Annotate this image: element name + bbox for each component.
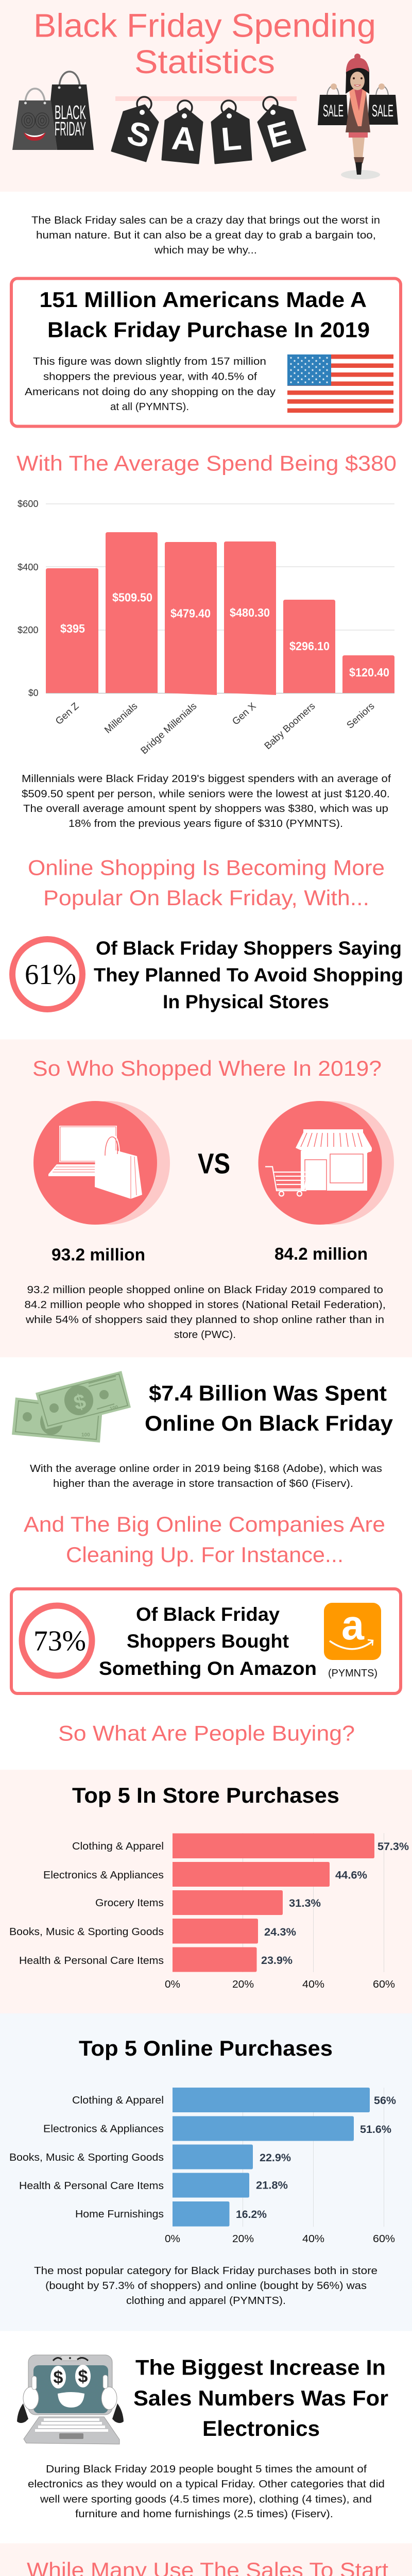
text block: millennials: Millennials were Black Friday 2019's biggest spenders with an average of xyxy=(22,773,391,785)
category labels xyxy=(9,2094,164,2220)
values: 44.6% xyxy=(335,1869,367,1882)
text block: shoppers figure xyxy=(25,355,276,413)
text block: average order: higher than the average in store transaction of $60 (Fiserv). xyxy=(53,1478,353,1489)
axis ticks: 20% xyxy=(232,2233,254,2245)
text: amazon shoppers: Shoppers Bought xyxy=(127,1631,289,1652)
heading: electronics: The Biggest Increase In xyxy=(135,2355,386,2379)
icon: sale tags xyxy=(112,96,305,163)
values: 31.3% xyxy=(289,1897,321,1909)
y axis labels: $400 xyxy=(18,562,38,572)
heading: electronics: Electronics xyxy=(202,2416,320,2441)
x axis labels: Millenials xyxy=(102,701,140,736)
panel: hero xyxy=(0,0,412,192)
title xyxy=(33,7,376,80)
callout: 61 percent: They Planned To Avoid Shopping xyxy=(94,964,403,986)
heading: online shopping: Popular On Black Friday, With... xyxy=(43,886,369,910)
text block: shoppers figure: shoppers the previous year, with 40.5% of xyxy=(43,371,257,382)
text block: shoppers comparison: 93.2 million people shopped online on Black Friday 2019 compared to xyxy=(27,1284,383,1296)
text block: most popular category: The most popular category for Black Friday purchases both in store xyxy=(34,2265,377,2277)
icon: woman holding sale bags xyxy=(318,54,398,179)
bars xyxy=(46,532,394,695)
icon: amazon logo xyxy=(324,1602,381,1660)
text block: shoppers comparison xyxy=(25,1284,386,1341)
panel: holiday shopping xyxy=(0,2543,412,2576)
category labels: Electronics & Appliances xyxy=(43,1869,164,1881)
text block: shoppers comparison: 84.2 million people who shopped in stores (National Retail Federation), xyxy=(25,1299,386,1311)
heading: electronics: Sales Numbers Was For xyxy=(133,2386,388,2410)
category labels: Clothing & Apparel xyxy=(72,1840,164,1852)
category labels: Books, Music & Sporting Goods xyxy=(9,2151,164,2163)
x axis labels: Baby Boomers xyxy=(263,701,317,752)
text block: most popular category: clothing and apparel (PYMNTS). xyxy=(126,2295,286,2307)
source: pymnts: (PYMNTS) xyxy=(328,1667,377,1679)
icon: dollar bills: 100 xyxy=(109,1404,119,1412)
text block: millennials: 18% from the previous years figure of $310 (PYMNTS). xyxy=(68,818,343,829)
values xyxy=(236,2094,396,2221)
values: 21.8% xyxy=(256,2179,288,2192)
values: 23.9% xyxy=(261,1954,293,1967)
heading: online shopping xyxy=(28,855,385,910)
text block: average order xyxy=(30,1463,382,1489)
icon: dollar bills: 100 xyxy=(81,1432,90,1438)
text block: millennials: The overall average amount spent by shoppers was $380, which was up xyxy=(23,803,388,815)
text block: intro: The Black Friday sales can be a crazy day that brings out the worst in xyxy=(31,214,380,226)
values: 16.2% xyxy=(236,2208,267,2221)
axis ticks: 40% xyxy=(302,1978,324,1990)
callout: 61 percent: 61% xyxy=(25,959,76,991)
heading: average spend: With The Average Spend Being $380 xyxy=(16,451,397,475)
panel: amazon callout xyxy=(11,1589,401,1693)
heading: what are people buying: So What Are People Buying? xyxy=(58,1721,355,1745)
bar values: $395 xyxy=(60,622,85,635)
text block: millennials: $509.50 spent per person, while seniors were the lowest at just $120.40. xyxy=(22,788,390,800)
text block: electronics sales: well were sporting goods (4.5 times more), clothing (4 times), and xyxy=(40,2494,372,2505)
chart title: Top 5 Online Purchases xyxy=(79,2036,333,2060)
x axis labels: Seniors xyxy=(345,701,376,731)
icon: sale tags: L xyxy=(219,120,243,158)
icon: happy laptop: $ xyxy=(78,2367,88,2386)
text block: electronics sales: furniture and home furnishings (2.5 times) (Fiserv). xyxy=(75,2508,333,2520)
category labels: Health & Personal Care Items xyxy=(19,2180,164,2192)
text block: electronics sales: electronics as they would on a typical Friday. Other categories that did xyxy=(28,2478,385,2490)
icon: happy laptop: $ xyxy=(54,2368,63,2387)
axis ticks xyxy=(165,1978,395,1990)
axis ticks: 60% xyxy=(373,2233,395,2245)
panel: 151 million americans xyxy=(11,278,401,427)
values xyxy=(261,1840,409,1967)
axis ticks: 20% xyxy=(232,1978,254,1990)
text block: shoppers figure: at all (PYMNTS). xyxy=(110,401,189,413)
icon: dollar bills xyxy=(12,1371,131,1443)
bar chart: average spend by generation xyxy=(18,499,394,756)
icon: dollar bills: $ xyxy=(72,1390,88,1415)
bar values: $296.10 xyxy=(289,639,330,653)
category labels: Health & Personal Care Items xyxy=(19,1955,164,1967)
values: 57.3% xyxy=(377,1840,409,1853)
y axis labels: $600 xyxy=(18,499,38,509)
values: 24.3% xyxy=(264,1926,296,1938)
values: 51.6% xyxy=(360,2123,391,2136)
text block: millennials xyxy=(22,773,391,829)
category labels: Clothing & Apparel xyxy=(72,2094,164,2106)
text block: intro: which may be why... xyxy=(154,244,257,256)
category labels: Electronics & Appliances xyxy=(43,2123,164,2135)
icon: online shopping xyxy=(33,1101,170,1225)
bars xyxy=(173,1833,374,1972)
stat: store shoppers: 84.2 million xyxy=(274,1244,368,1263)
icon: sale tags: E xyxy=(263,113,294,155)
bar values xyxy=(60,590,389,679)
y axis labels: $200 xyxy=(18,625,38,635)
text block: most popular category xyxy=(34,2265,377,2307)
axis ticks: 60% xyxy=(373,1978,395,1990)
text block: electronics sales xyxy=(28,2463,385,2520)
bar values: $120.40 xyxy=(349,666,389,679)
heading: big online companies: Cleaning Up. For Instance... xyxy=(66,1543,344,1567)
text: amazon shoppers: Of Black Friday xyxy=(136,1604,280,1625)
heading: 151 million: Black Friday Purchase In 2019 xyxy=(47,317,370,342)
values: 56% xyxy=(374,2094,396,2107)
panel: top 5 online xyxy=(0,2013,412,2331)
heading: who shopped where: So Who Shopped Where In 2019? xyxy=(32,1056,382,1080)
bar values: $480.30 xyxy=(230,606,270,619)
bar values: $509.50 xyxy=(112,590,152,604)
heading: 151 million xyxy=(39,287,370,342)
heading: electronics xyxy=(133,2355,388,2441)
icon: black friday shopping bags xyxy=(12,72,94,150)
callout: 61 percent: In Physical Stores xyxy=(163,991,329,1012)
title: Black Friday Spending xyxy=(33,7,376,44)
icon: amazon logo: a xyxy=(341,1602,365,1649)
icon: in store shopping xyxy=(259,1101,394,1225)
heading: online shopping: Online Shopping Is Becoming More xyxy=(28,855,385,880)
icon: happy laptop xyxy=(17,2355,124,2444)
text: vs: VS xyxy=(198,1147,230,1180)
y axis labels: $0 xyxy=(28,688,38,698)
stat: online shoppers: 93.2 million xyxy=(52,1245,145,1264)
category labels: Home Furnishings xyxy=(75,2208,164,2220)
text block: intro: human nature. But it can also be a great day to grab a bargain too, xyxy=(36,229,376,241)
bar chart: in store purchases xyxy=(9,1833,409,1990)
heading: 7.4 billion: Online On Black Friday xyxy=(145,1411,393,1435)
text block: average order: With the average online order in 2019 being $168 (Adobe), which was xyxy=(30,1463,382,1475)
x axis labels xyxy=(54,701,376,756)
axis ticks: 40% xyxy=(302,2233,324,2245)
icon: black friday shopping bags: FRIDAY xyxy=(55,118,86,140)
heading: 151 million: 151 Million Americans Made A xyxy=(39,287,367,312)
chart title: Top 5 In Store Purchases xyxy=(72,1783,339,1807)
icon: american flag xyxy=(287,354,393,413)
values: 22.9% xyxy=(260,2151,291,2164)
heading: 7.4 billion xyxy=(145,1381,393,1435)
bar values: $479.40 xyxy=(170,607,211,620)
x axis labels: Gen X xyxy=(230,701,259,727)
text block: intro xyxy=(31,214,380,256)
text block: shoppers figure: Americans not doing do any shopping on the day xyxy=(25,386,276,398)
axis ticks: 0% xyxy=(165,2233,180,2245)
title: Statistics xyxy=(134,43,275,80)
callout: 61 percent: Of Black Friday Shoppers Saying xyxy=(96,938,402,959)
bar chart: online purchases xyxy=(9,2088,396,2245)
text block: shoppers comparison: while 54% of shoppers said they planned to shop online rather than in xyxy=(25,1314,384,1326)
category labels xyxy=(9,1840,164,1967)
heading: big online companies xyxy=(24,1512,385,1567)
text block: shoppers comparison: store (PWC). xyxy=(174,1329,236,1341)
stat ring: 73 percent: 73% xyxy=(33,1625,86,1657)
x axis labels: Gen Z xyxy=(54,701,81,727)
category labels: Grocery Items xyxy=(95,1897,164,1909)
icon: black friday shopping bags: BLACK xyxy=(55,102,86,124)
bars xyxy=(173,2088,370,2227)
icon: sale tags: A xyxy=(170,119,197,158)
text: amazon shoppers: Something On Amazon xyxy=(99,1658,317,1679)
callout: 61 percent xyxy=(12,938,403,1012)
panel: who shopped where xyxy=(0,1040,412,1357)
category labels: Books, Music & Sporting Goods xyxy=(9,1926,164,1938)
text block: electronics sales: During Black Friday 2019 people bought 5 times the amount of xyxy=(46,2463,367,2475)
axis ticks: 0% xyxy=(165,1978,180,1990)
heading: 7.4 billion: $7.4 Billion Was Spent xyxy=(149,1381,387,1405)
icon: sale tags: S xyxy=(124,113,154,155)
y axis labels xyxy=(18,499,38,698)
panel: top 5 in store xyxy=(0,1770,412,2013)
text block: most popular category: (bought by 57.3% of shoppers) and online (bought by 56%) was xyxy=(45,2280,367,2292)
axis ticks xyxy=(165,2233,395,2245)
icon: woman holding sale bags: SALE xyxy=(323,101,344,120)
text: amazon shoppers xyxy=(99,1604,317,1679)
heading: big online companies: And The Big Online Companies Are xyxy=(24,1512,385,1536)
stat ring: 73 percent xyxy=(22,1605,92,1675)
x axis labels: Bridge Millenials xyxy=(139,701,199,756)
text block: shoppers figure: This figure was down slightly from 157 million xyxy=(33,355,266,367)
